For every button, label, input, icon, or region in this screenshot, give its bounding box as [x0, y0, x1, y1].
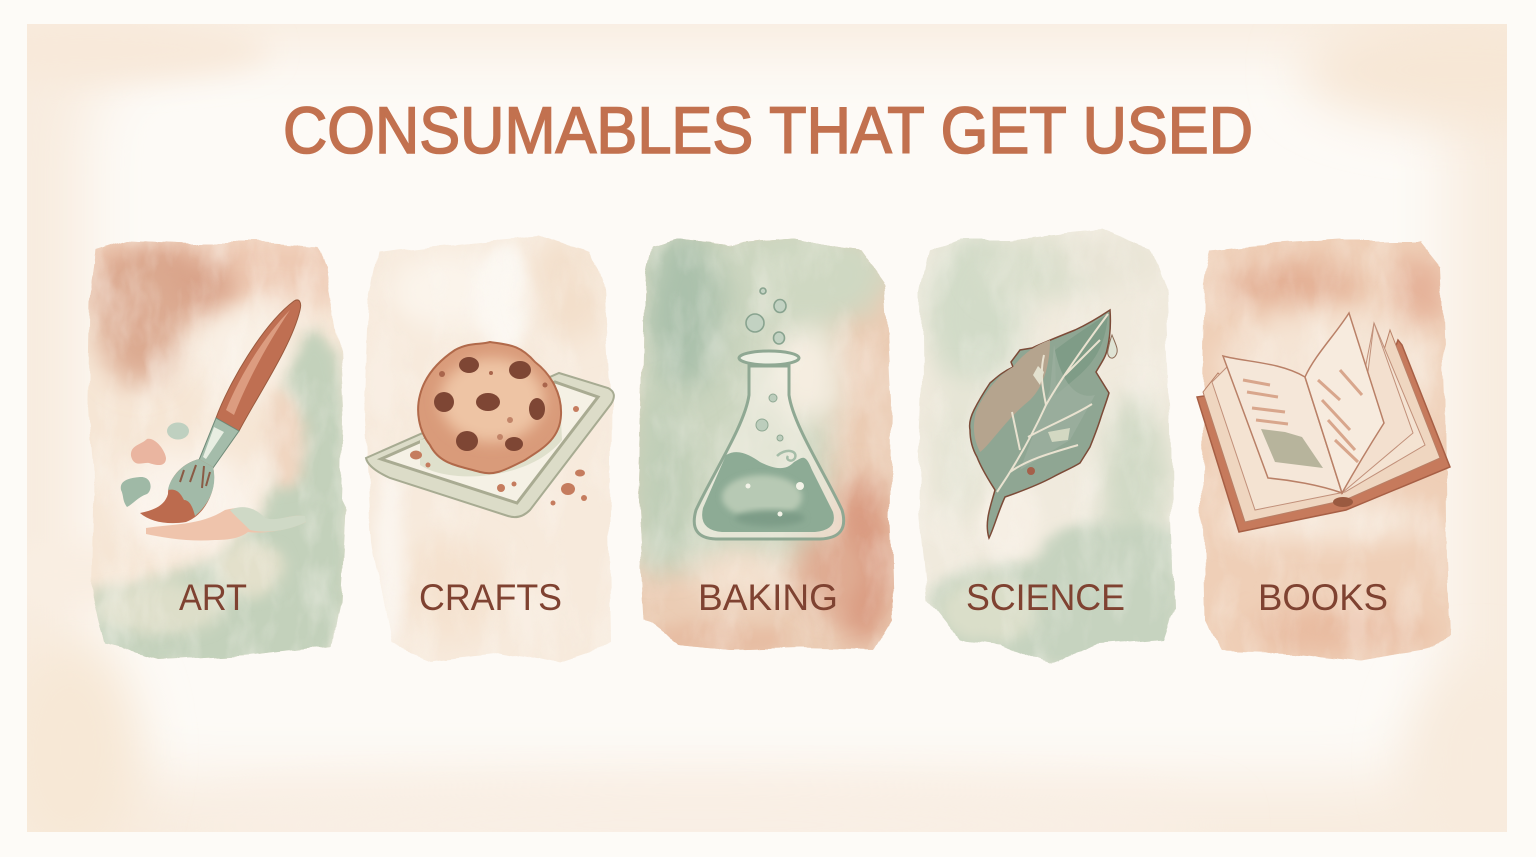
- icon: crumbs: [410, 406, 587, 506]
- books watercolor wash: [1195, 225, 1460, 670]
- baking watercolor wash: [638, 238, 894, 650]
- label: art: ART: [179, 577, 247, 618]
- icon: open book: [1197, 313, 1450, 532]
- label: science: SCIENCE: [966, 577, 1125, 618]
- icon: flask: [694, 351, 844, 539]
- icon: paintbrush: [140, 300, 301, 523]
- panel: art: [87, 239, 346, 659]
- art watercolor wash: [87, 239, 346, 659]
- icon: bubbles: [746, 288, 786, 344]
- icon: paint stroke: [146, 508, 306, 541]
- label: baking: BAKING: [698, 577, 838, 618]
- panel: books: [1195, 225, 1460, 670]
- panel: baking: [638, 238, 894, 650]
- science watercolor wash: [910, 225, 1185, 675]
- icon: cookie: [418, 342, 561, 473]
- label: crafts: CRAFTS: [419, 577, 562, 618]
- title: CONSUMABLES THAT GET USED: [283, 94, 1253, 167]
- crafts watercolor wash: [364, 236, 614, 662]
- panel: crafts: [364, 236, 615, 662]
- icon: baking tray: [366, 373, 614, 517]
- icon: leaf: [970, 310, 1117, 538]
- panel: science: [910, 225, 1185, 675]
- icon: paint splats: [121, 422, 189, 507]
- label: books: BOOKS: [1258, 577, 1388, 618]
